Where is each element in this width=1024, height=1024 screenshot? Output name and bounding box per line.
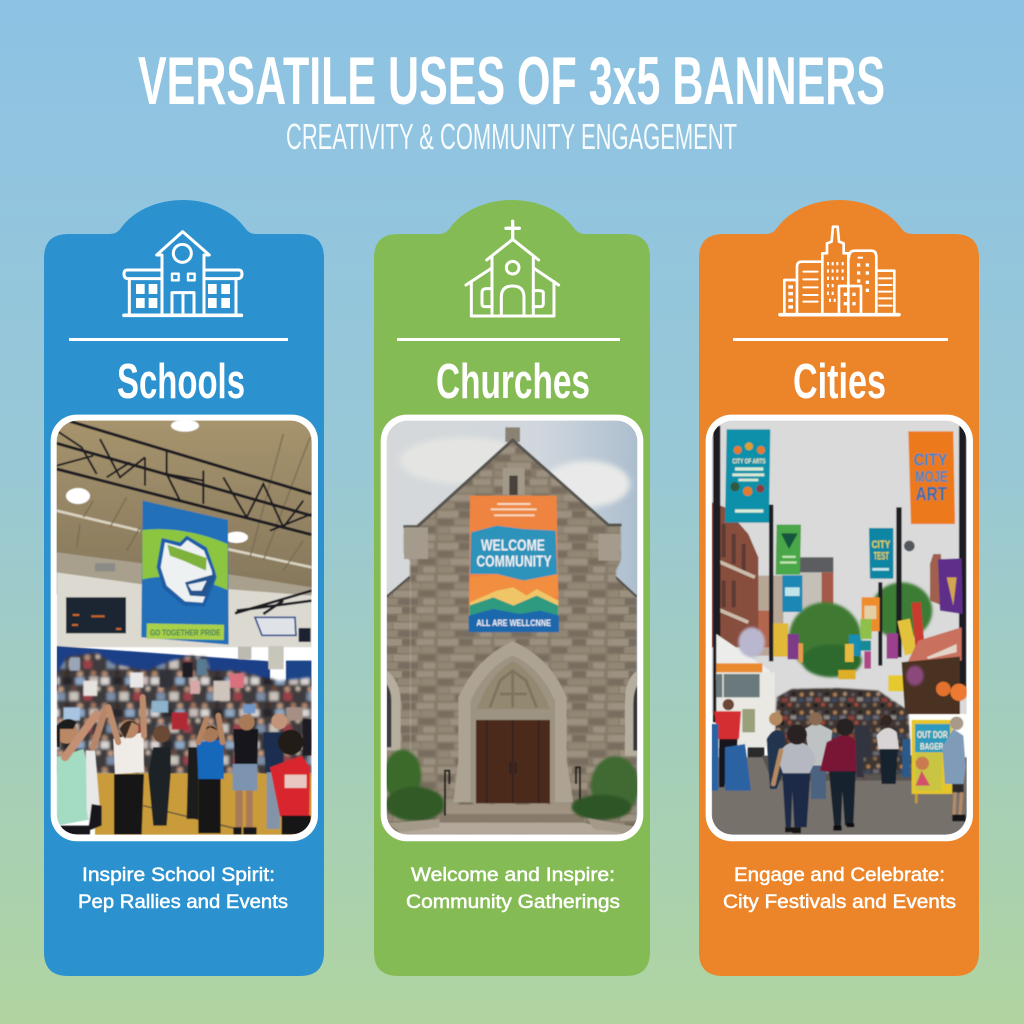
street people — [714, 711, 741, 739]
heading: churches: Churches — [436, 355, 590, 409]
photo: city street festival: CITY OF ARTS — [732, 458, 766, 465]
caption: schools — [78, 864, 288, 913]
photo: city street festival: CITY — [872, 539, 890, 551]
panel: churches — [374, 200, 650, 976]
caption: churches — [406, 864, 620, 913]
panel background: schools — [44, 200, 324, 976]
photo: city street festival: OUT DOR — [917, 730, 948, 741]
photo: school gym pep rally: GO TOGETHER PRIDE — [150, 627, 221, 637]
foreground people — [55, 697, 312, 835]
panel: cities — [699, 200, 979, 976]
storefront — [907, 627, 962, 664]
photo: stone church with welcome banner: ALL ARE WELLCNNE — [476, 618, 551, 628]
poles — [713, 426, 966, 722]
arch windows — [387, 671, 401, 751]
photo: city street festival: TEST — [874, 550, 889, 562]
crowd — [773, 688, 912, 774]
scoreboard — [66, 597, 126, 633]
subtitle: CREATIVITY & COMMUNITY ENGAGEMENT — [286, 116, 737, 157]
shrubs — [384, 750, 639, 821]
photo: city street festival — [705, 414, 975, 841]
crowd — [57, 652, 312, 777]
caption: schools: Inspire School Spirit: — [82, 864, 275, 886]
street banners — [725, 429, 770, 523]
heading: cities: Cities — [793, 355, 886, 409]
photo: stone church with welcome banner: COMMUNITY — [476, 554, 552, 571]
portal — [453, 641, 573, 802]
photo: stone church with welcome banner: WELCOME — [481, 538, 545, 555]
steps — [446, 805, 579, 814]
photo: school gym pep rally — [50, 414, 320, 841]
photo: city street festival: ART — [916, 485, 947, 506]
icon: school building — [124, 232, 242, 315]
caption: cities — [723, 864, 956, 913]
photo: city street festival: MOJE — [915, 469, 948, 486]
photo: stone church with welcome banner — [380, 414, 647, 844]
panel background: churches — [374, 200, 650, 976]
hoop — [255, 617, 296, 635]
panel: schools — [44, 200, 324, 976]
banner — [469, 496, 559, 632]
heading: schools: Schools — [117, 355, 245, 409]
caption: churches: Community Gatherings — [406, 891, 620, 913]
truck — [716, 634, 770, 681]
caption: cities: City Festivals and Events — [723, 891, 956, 913]
caption: cities: Engage and Celebrate: — [734, 864, 945, 886]
festival sign — [912, 720, 952, 794]
mascot banner — [141, 501, 229, 645]
photo: city street festival: BAGER — [920, 741, 943, 751]
trees — [789, 582, 932, 677]
caption: schools: Pep Rallies and Events — [78, 891, 288, 913]
panel background: cities — [699, 200, 979, 976]
blue wall — [57, 646, 270, 691]
icon: city skyline — [780, 227, 899, 315]
truss — [57, 421, 312, 614]
caption: churches: Welcome and Inspire: — [411, 864, 615, 886]
street — [712, 757, 968, 837]
photo: city street festival: CITY — [914, 450, 948, 470]
icon: church — [466, 221, 559, 316]
